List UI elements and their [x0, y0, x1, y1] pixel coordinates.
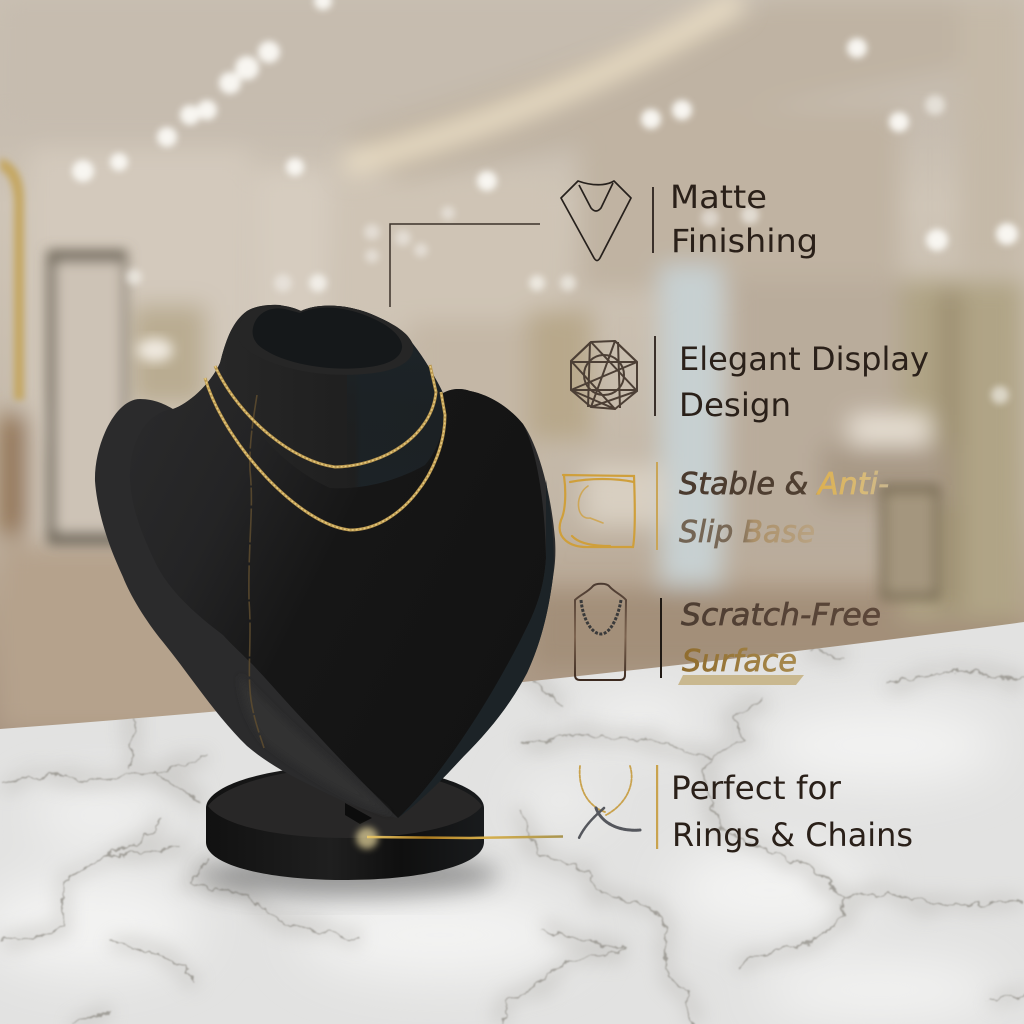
marble table top — [0, 620, 1024, 1024]
lower band highlight — [240, 675, 392, 815]
icon: crossed gold and silver chain — [579, 766, 640, 838]
neck opening — [253, 308, 402, 369]
text: slip base: Slip Base — [679, 515, 815, 550]
text: scratch-free: Scratch-Free — [681, 598, 881, 633]
text: stable and anti: Stable & Anti- — [679, 467, 889, 502]
text: perfect for rings and chains: Perfect for — [671, 769, 842, 807]
divider — [654, 336, 656, 416]
gold crack line — [249, 395, 264, 748]
feature: stable and anti-slip base — [560, 462, 889, 550]
lower gold chain — [205, 378, 445, 530]
feature: perfect for rings and chains — [579, 765, 913, 854]
feature: matte finishing: Finishing — [671, 222, 818, 260]
icon: gold square base — [560, 475, 635, 547]
bust front face — [130, 363, 546, 818]
neck — [220, 305, 444, 488]
feature: scratch-free surface — [575, 584, 881, 685]
feature: elegant display design: Design — [679, 386, 791, 424]
round base — [206, 766, 484, 880]
upper gold chain — [215, 365, 436, 467]
divider — [652, 187, 654, 253]
text: surface: Surface — [682, 644, 797, 679]
icon: bust with chain — [575, 584, 626, 680]
feature: matte finishing — [561, 178, 818, 260]
icon: gem wireframe — [571, 341, 637, 409]
feature: perfect for rings and chains: Rings & Chains — [672, 816, 913, 854]
feature: elegant display design — [571, 336, 929, 424]
text: elegant display design: Elegant Display — [679, 340, 929, 378]
gold underline swatch — [678, 675, 804, 685]
divider — [660, 598, 662, 678]
necklace bust display stand — [95, 305, 555, 880]
bust silhouette with side face — [95, 305, 555, 818]
right bevel — [398, 480, 554, 818]
gold leader line from base — [356, 827, 563, 849]
neck right shade — [347, 348, 444, 490]
leader line to matte finishing — [390, 224, 540, 307]
text: matte finishing: Matte — [670, 178, 767, 216]
neck rim — [238, 305, 413, 375]
icon: necklace outline — [561, 181, 631, 260]
divider — [656, 462, 658, 550]
divider — [656, 765, 658, 849]
